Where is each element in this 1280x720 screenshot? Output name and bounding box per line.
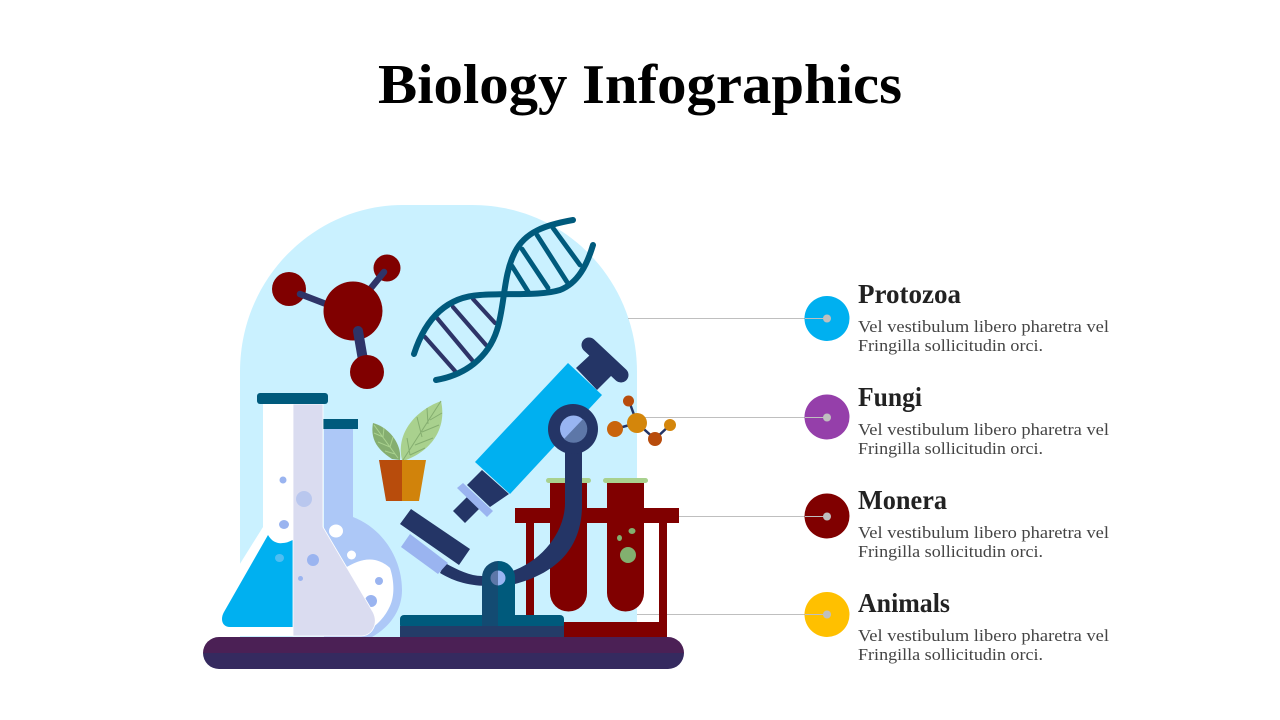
- connector lines: [628, 318, 827, 614]
- item: Monera: [804, 485, 1109, 561]
- item: Animals: [804, 588, 1109, 664]
- item: Animals: Fringilla sollicitudin orci.: [858, 645, 1043, 664]
- icon: DNA helix: [414, 220, 593, 380]
- item: Animals: Vel vestibulum libero pharetra vel: [858, 626, 1109, 645]
- icon: conical flask: [205, 393, 375, 636]
- item: Protozoa: Fringilla sollicitudin orci.: [858, 336, 1043, 355]
- item: Fungi: Vel vestibulum libero pharetra vel: [858, 420, 1109, 439]
- item: Monera: Monera: [858, 485, 947, 515]
- icon: round flask: [323, 419, 402, 637]
- item: Fungi: Fungi: [858, 382, 922, 412]
- item: Protozoa: Protozoa: [858, 279, 961, 309]
- item: Animals: Animals: [858, 588, 950, 618]
- item: Protozoa: Vel vestibulum libero pharetra vel: [858, 317, 1109, 336]
- item: Protozoa: [804, 279, 1109, 355]
- title: Biology Infographics: [378, 54, 902, 116]
- icon: molecule: [272, 254, 400, 389]
- icon: small orange molecule: [607, 396, 676, 446]
- background arch panel: [240, 205, 637, 637]
- icon: test tube rack: [515, 478, 679, 637]
- icon: microscope: [400, 345, 621, 637]
- item: Fungi: Fringilla sollicitudin orci.: [858, 439, 1043, 458]
- table base: [203, 637, 684, 669]
- item: Monera: Vel vestibulum libero pharetra vel: [858, 523, 1109, 542]
- item: Fungi: [804, 382, 1109, 458]
- item: Monera: Fringilla sollicitudin orci.: [858, 542, 1043, 561]
- icon: potted plant: [372, 401, 442, 501]
